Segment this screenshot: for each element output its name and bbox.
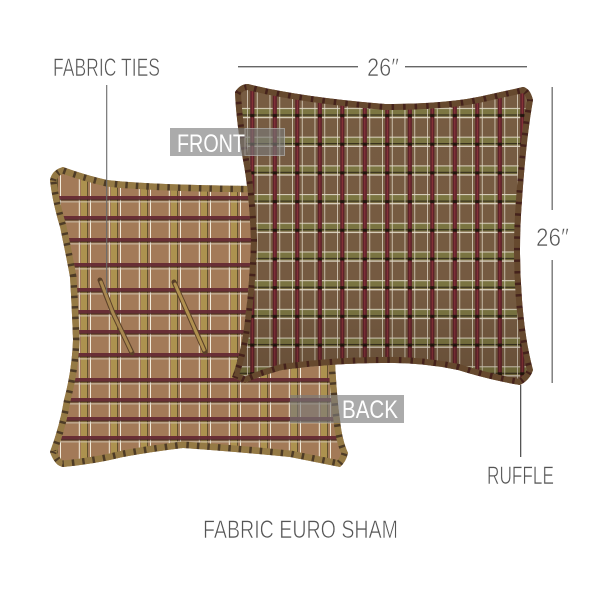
fabric tie left [100,280,132,353]
panel: back of pillow [50,167,348,467]
back ruffle [50,167,348,467]
label tag: back: BACK [342,396,398,424]
height dimension line top [552,87,553,210]
fabric ties leader line [106,85,107,293]
label tag: front [170,128,285,158]
ruffle leader line [520,385,521,457]
ruffle label: RUFFLE [487,462,554,490]
fabric tie right [174,282,205,352]
fabric ties label: FABRIC TIES [53,54,160,82]
width dimension label: 26″ [367,54,399,82]
label tag: front: FRONT [177,130,245,158]
width dimension line right [405,66,527,67]
height dimension label: 26″ [536,224,569,252]
panel: front of pillow [225,80,540,390]
width dimension line left [238,66,358,67]
infographic: fabric euro sham [50,58,568,538]
height dimension line bottom [552,260,553,383]
front fabric plaid [225,80,540,390]
back fabric plaid [50,167,348,467]
front ruffle [232,84,533,385]
label tag: back [290,395,404,424]
caption: FABRIC EURO SHAM [203,516,398,544]
